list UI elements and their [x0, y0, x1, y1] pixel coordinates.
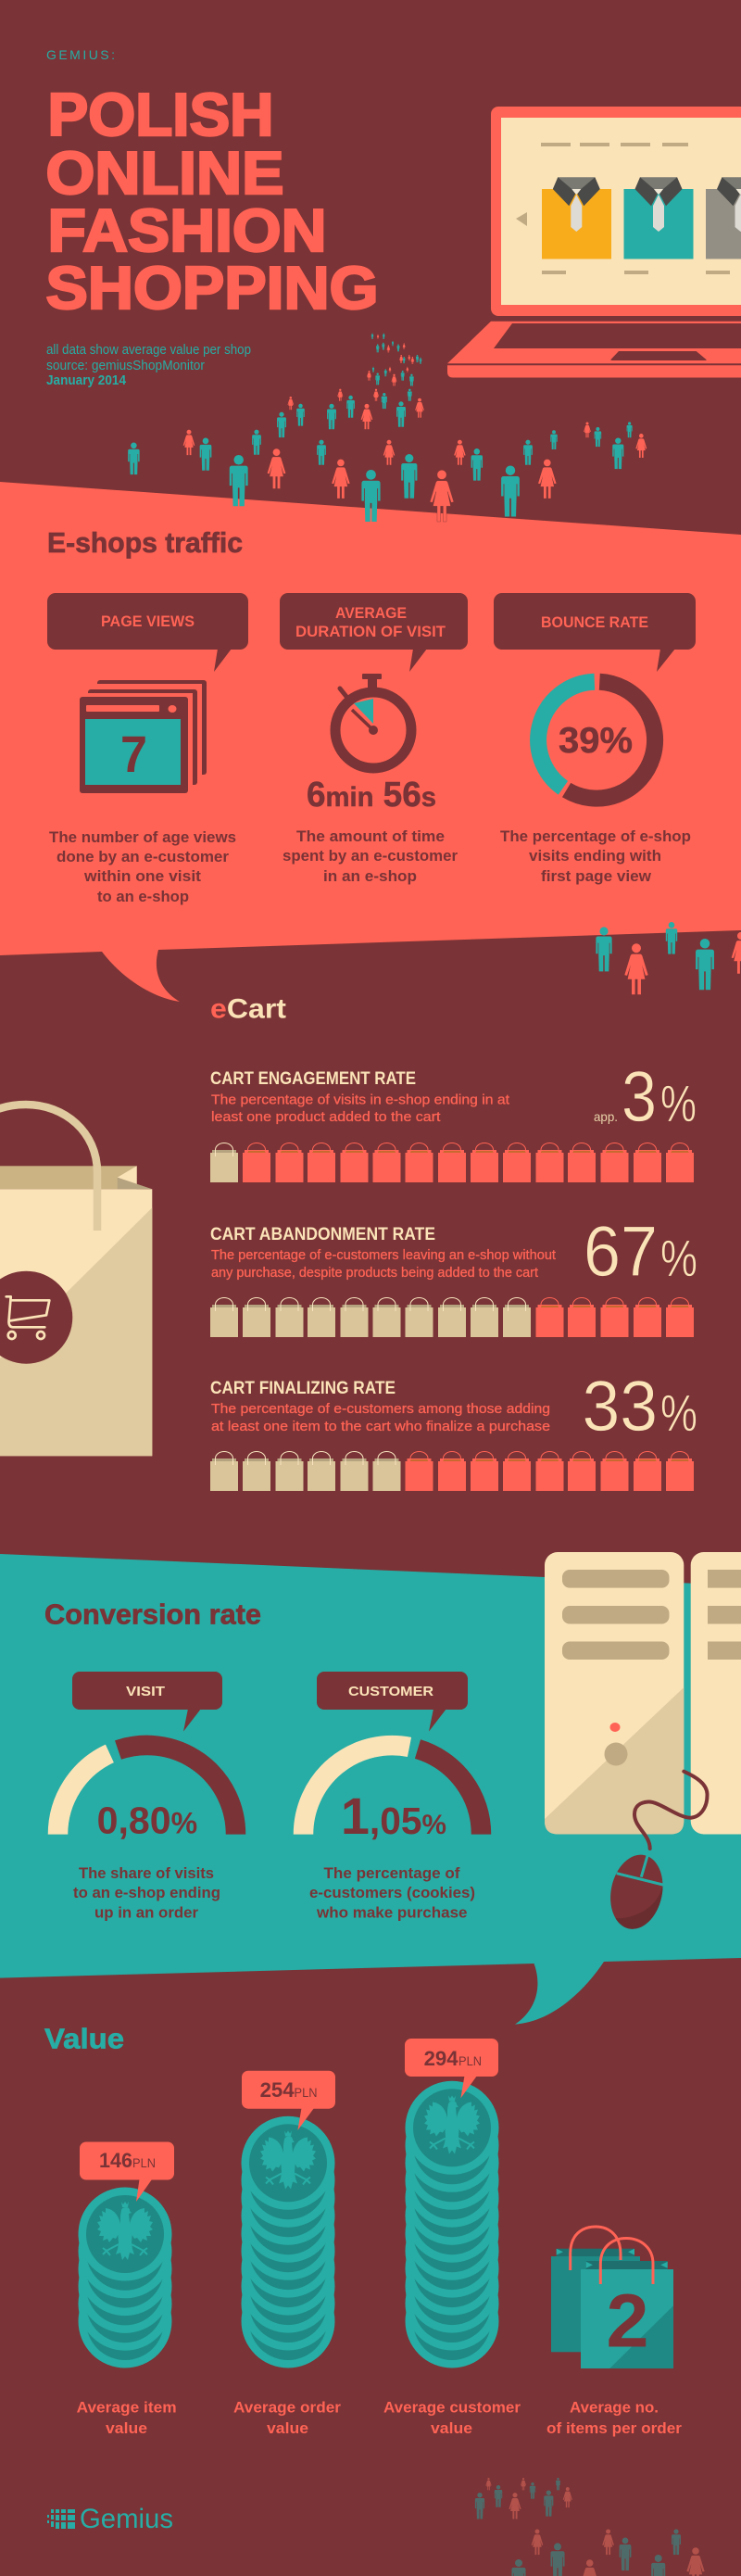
stat block: cart abandonment rate: any purchase, despite products being added to the cart	[211, 1265, 539, 1281]
chart: customer gauge: 1,05%	[341, 1787, 446, 1845]
icon: computer towers	[545, 1552, 741, 1835]
icon: large shopping bag	[0, 1105, 152, 1456]
text: customer description: The percentage of	[324, 1864, 460, 1882]
panel: e-shops traffic background	[0, 482, 741, 1002]
stat block: cart abandonment rate: CART ABANDONMENT RATE	[210, 1225, 435, 1244]
text: customer description	[309, 1864, 475, 1922]
text: bounce rate description: first page view	[541, 867, 652, 885]
source note: January 2014	[46, 373, 127, 388]
stat block: cart finalizing rate: at least one item to the cart who finalize a purchase	[211, 1419, 550, 1434]
chart: bounce rate donut	[538, 682, 655, 799]
callout: 146 PLN: PLN	[132, 2155, 156, 2170]
source note: source: gemiusShopMonitor	[46, 358, 205, 373]
label: average order value	[233, 2398, 341, 2437]
chart: visit gauge: 0,80%	[97, 1799, 197, 1842]
callout: 254 PLN: 254	[260, 2078, 295, 2102]
heading: e-shops traffic: E-shops traffic	[47, 526, 243, 559]
text: visit description	[73, 1864, 220, 1922]
icon: browser pages with 7	[80, 680, 207, 793]
shoppers on the divider	[596, 922, 741, 994]
callout: 294 PLN: 294	[424, 2047, 458, 2070]
text: duration description	[283, 827, 458, 885]
stat block: cart engagement rate	[210, 1057, 697, 1182]
logo: Gemius: Gemius	[80, 2504, 173, 2534]
stat block: cart abandonment rate: The percentage of e-customers leaving an e-shop without	[211, 1247, 557, 1263]
panel: conversion rate background	[0, 1554, 741, 2025]
chart: customer gauge	[304, 1746, 482, 1845]
text: bounce rate description	[500, 827, 691, 885]
text: visit description: up in an order	[94, 1903, 198, 1922]
text: visit description: to an e-shop ending	[73, 1884, 220, 1901]
text: customer description: who make purchase	[316, 1903, 467, 1922]
stat block: cart engagement rate: least one product added to the cart	[211, 1109, 441, 1125]
label: average order value: Average order	[233, 2398, 341, 2417]
stat block: cart finalizing rate: 33	[582, 1367, 658, 1446]
heading: conversion rate: Conversion rate	[44, 1597, 261, 1631]
callout: 254 PLN	[242, 2071, 335, 2130]
callout: average duration of visit: AVERAGE	[335, 604, 407, 622]
callout: 146 PLN	[80, 2142, 174, 2202]
text: duration description: The amount of time	[296, 827, 445, 845]
stat block: cart engagement rate: app.	[594, 1109, 618, 1124]
text: page views description: within one visit	[83, 867, 201, 885]
label: average item value: value	[106, 2419, 147, 2437]
stat block: cart abandonment rate: %	[660, 1229, 697, 1287]
stat: 6min 56s: 6min 56s	[307, 776, 436, 814]
callout: 254 PLN: PLN	[295, 2085, 317, 2100]
callout: visit: VISIT	[126, 1684, 165, 1699]
text: duration description: spent by an e-customer	[283, 847, 458, 865]
stat block: cart finalizing rate	[210, 1367, 697, 1491]
chart: coin stack average order value	[241, 2116, 335, 2368]
callout: average duration of visit	[280, 593, 468, 672]
stat block: cart abandonment rate	[210, 1212, 697, 1337]
heading: value: Value	[44, 2022, 124, 2055]
label: average order value: value	[267, 2419, 308, 2437]
icon: stopwatch	[335, 674, 411, 768]
stat block: cart engagement rate: CART ENGAGEMENT RATE	[210, 1069, 416, 1089]
crowd of shoppers	[128, 334, 647, 522]
chart: coin stack average customer value	[406, 2081, 498, 2368]
text: bounce rate description: visits ending with	[529, 847, 661, 865]
stat block: cart engagement rate: %	[660, 1074, 697, 1132]
label: average number of items per order: of items per order	[546, 2419, 682, 2437]
callout: 294 PLN: PLN	[458, 2053, 482, 2068]
callout: customer: CUSTOMER	[348, 1684, 433, 1699]
stat block: cart engagement rate: The percentage of visits in e-shop ending in at	[211, 1092, 510, 1108]
callout: 146 PLN: 146	[99, 2149, 132, 2172]
callout: 294 PLN	[405, 2039, 498, 2098]
label: average number of items per order	[546, 2398, 682, 2437]
stat block: cart finalizing rate: CART FINALIZING RATE	[210, 1379, 396, 1398]
callout: bounce rate	[494, 593, 696, 672]
text: bounce rate description: The percentage of e-shop	[500, 827, 691, 845]
icon: browser pages with 7: 7	[120, 725, 147, 783]
title: POLISH	[48, 81, 274, 148]
source note	[46, 342, 251, 388]
text: page views description	[49, 828, 236, 905]
label: average item value	[77, 2398, 177, 2437]
icon: two shopping bags	[551, 2227, 673, 2368]
text: page views description: done by an e-customer	[57, 848, 229, 865]
label: average customer value: Average customer	[383, 2398, 521, 2417]
text: page views description: to an e-shop	[97, 888, 189, 905]
title	[46, 81, 378, 322]
icon: mouse with cord	[610, 1770, 710, 1929]
chart: visit gauge	[57, 1745, 236, 1842]
callout: page views	[47, 593, 248, 672]
chart: coin stack average item value	[78, 2187, 172, 2368]
title: ONLINE	[46, 139, 283, 207]
title: FASHION	[48, 196, 326, 264]
stat block: cart finalizing rate: %	[660, 1383, 697, 1442]
stat block: cart abandonment rate: 67	[584, 1212, 658, 1292]
callout: bounce rate: BOUNCE RATE	[541, 613, 648, 631]
label: average number of items per order: Average no.	[570, 2398, 659, 2417]
callout: average duration of visit: DURATION OF VISIT	[295, 623, 446, 640]
icon: laptop with shirts	[447, 107, 741, 378]
callout: customer	[317, 1672, 468, 1732]
stat block: cart engagement rate: 3	[622, 1057, 657, 1137]
source note: all data show average value per shop	[46, 342, 251, 358]
chart: bounce rate donut: 39%	[559, 721, 633, 761]
callout: page views: PAGE VIEWS	[101, 612, 195, 630]
text: duration description: in an e-shop	[323, 867, 417, 885]
label: average item value: Average item	[77, 2398, 177, 2417]
label: average customer value: value	[431, 2419, 472, 2437]
heading: eCart: eCart	[210, 993, 286, 1025]
text: customer description: e-customers (cookies)	[309, 1884, 475, 1901]
callout: visit	[72, 1672, 222, 1732]
title: SHOPPING	[46, 254, 378, 322]
text: visit description: The share of visits	[79, 1864, 214, 1882]
stat block: cart finalizing rate: The percentage of e-customers among those adding	[211, 1401, 550, 1417]
brand label: GEMIUS:	[46, 47, 115, 62]
text: page views description: The number of age views	[49, 828, 236, 846]
faded crowd	[475, 2478, 705, 2576]
icon: two shopping bags: 2	[606, 2279, 648, 2363]
label: average customer value	[383, 2398, 521, 2437]
